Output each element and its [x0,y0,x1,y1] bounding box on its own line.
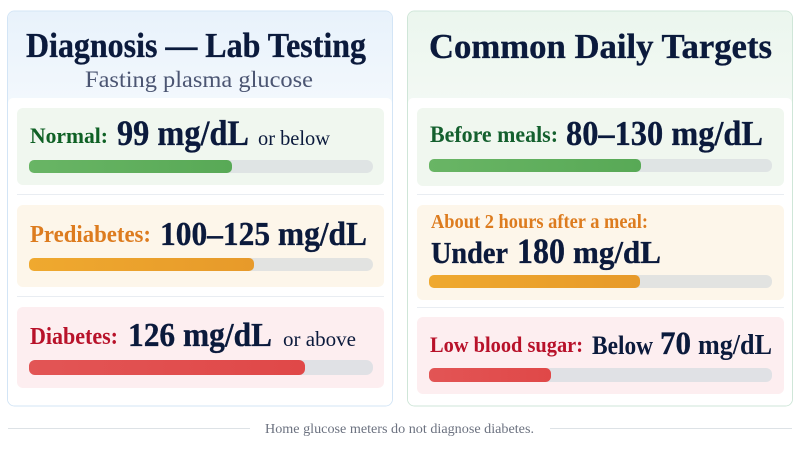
row: low blood sugar: Low blood sugar: [430,332,583,357]
row: after a meal: Under [431,235,508,270]
row: after a meal [417,205,784,300]
row: prediabetes: Prediabetes: [30,222,151,248]
panel: common daily targets [408,11,792,406]
row: low blood sugar: 70 [660,326,691,362]
panel: diagnosis lab testing [8,11,392,406]
subheading: fasting plasma glucose: Fasting plasma glucose [85,67,313,92]
row: diabetes [17,307,384,388]
footer note: Home glucose meters do not diagnose diabetes. [265,422,534,437]
row: diabetes: or above [283,327,356,351]
panel header: diagnosis [8,12,392,104]
row: after a meal: mg/dL [573,234,661,270]
row: diabetes: 126 mg/dL [128,317,272,354]
row: before meals: Before meals: [430,122,558,147]
row: prediabetes: 100–125 mg/dL [160,216,367,253]
row: normal [17,108,384,185]
row: normal: 99 mg/dL [117,113,249,153]
row: low blood sugar [417,317,784,394]
row: low blood sugar: mg/dL [698,330,772,361]
panel body: targets [408,98,792,406]
row: prediabetes [17,205,384,287]
row: diabetes: Diabetes: [30,324,118,350]
panel body: diagnosis [8,98,392,406]
row: normal: Normal: [30,123,108,148]
row: normal: or below [258,126,331,150]
row: before meals: 80–130 mg/dL [566,114,763,153]
heading: diagnosis: Diagnosis — Lab Testing [26,26,366,65]
heading: targets: Common Daily Targets [429,27,772,66]
panel header: targets [408,12,792,104]
row: before meals [417,108,784,186]
row: after a meal: 180 [517,231,565,271]
row: low blood sugar: Below [592,331,653,360]
row: after a meal: About 2 hours after a meal: [431,211,648,233]
